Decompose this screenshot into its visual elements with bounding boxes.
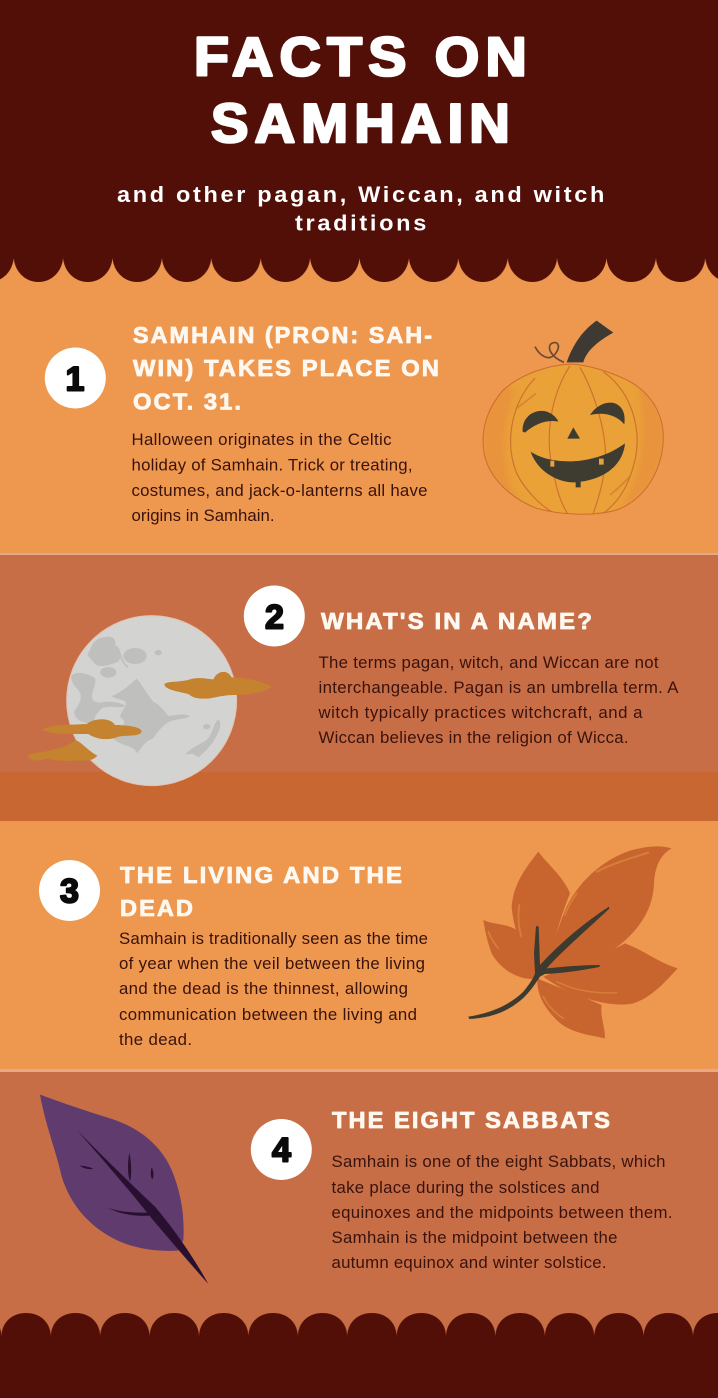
heading: fact 3: THE LIVING AND THE [120, 862, 404, 888]
heading: fact 1 [133, 322, 441, 414]
heading: fact 4: THE EIGHT SABBATS [332, 1107, 612, 1133]
body text: fact 2: The terms pagan, witch, and Wiccan are not [318, 653, 659, 672]
body text: fact 1: Halloween originates in the Celtic [132, 430, 392, 449]
heading: fact 3 [120, 862, 404, 921]
panel: fact 3 [39, 846, 678, 1049]
panel: fact 1 [45, 321, 664, 525]
subtitle [117, 182, 607, 236]
body text: fact 2: interchangeable. Pagan is an umbrella term. A [318, 678, 679, 697]
icon: purple leaf [40, 1095, 208, 1284]
footer band [0, 1313, 718, 1398]
number badge 4 [251, 1119, 312, 1180]
title: SAMHAIN [211, 92, 516, 154]
panel: section 2 background [0, 553, 718, 772]
title [194, 26, 533, 154]
title: FACTS ON [194, 26, 533, 88]
subtitle: and other pagan, Wiccan, and witch [117, 182, 607, 207]
number badge 4: 4 [272, 1132, 291, 1170]
number badge 3 [39, 860, 100, 921]
panel: section 2 lower band [0, 772, 718, 821]
panel: fact 2 [27, 586, 679, 786]
header band [0, 0, 718, 282]
heading: fact 1: OCT. 31. [133, 388, 243, 414]
body text: fact 4: Samhain is the midpoint between the [332, 1228, 618, 1247]
number badge 2 [244, 586, 305, 646]
body text: fact 3 [119, 929, 428, 1049]
body text: fact 4: equinoxes and the midpoints between them. [332, 1203, 672, 1222]
number badge 2: 2 [265, 598, 284, 636]
body text: fact 1: holiday of Samhain. Trick or treating, [132, 456, 412, 474]
number badge 3: 3 [60, 872, 79, 910]
body text: fact 3: the dead. [119, 1030, 192, 1049]
body text: fact 1: origins in Samhain. [132, 506, 274, 525]
icon: orange maple leaf [468, 846, 678, 1038]
body text: fact 3: of year when the veil between the living [119, 954, 425, 973]
body text: fact 4: Samhain is one of the eight Sabbats, which [332, 1152, 666, 1171]
body text: fact 3: communication between the living and [119, 1005, 417, 1024]
heading: fact 1: WIN) TAKES PLACE ON [133, 355, 441, 381]
body text: fact 1: costumes, and jack-o-lanterns all have [132, 481, 428, 500]
body text: fact 4: take place during the solstices and [332, 1178, 600, 1197]
body text: fact 3: Samhain is traditionally seen as the time [119, 929, 428, 948]
number badge 1 [45, 348, 106, 408]
body text: fact 4 [332, 1152, 672, 1272]
heading: fact 2: WHAT'S IN A NAME? [321, 608, 594, 634]
panel: section 3 background [0, 821, 718, 1069]
body text: fact 2: Wiccan believes in the religion of Wicca. [318, 728, 628, 747]
icon: jack-o-lantern pumpkin [482, 321, 664, 514]
subtitle: traditions [295, 210, 429, 236]
number badge 1: 1 [66, 360, 84, 398]
heading: fact 3: DEAD [120, 895, 195, 921]
panel: fact 4 [40, 1095, 673, 1284]
body text: fact 2: witch typically practices witchcraft, and a [318, 703, 643, 722]
body text: fact 4: autumn equinox and winter solstice. [332, 1253, 606, 1272]
icon: full moon with clouds [27, 616, 272, 786]
body text: fact 2 [318, 653, 679, 747]
heading: fact 1: SAMHAIN (PRON: SAH- [133, 322, 434, 348]
panel: section 1 background [0, 258, 718, 553]
body text: fact 3: and the dead is the thinnest, allowing [119, 979, 408, 998]
body text: fact 1 [132, 430, 428, 525]
panel: section 4 background [0, 1069, 718, 1339]
